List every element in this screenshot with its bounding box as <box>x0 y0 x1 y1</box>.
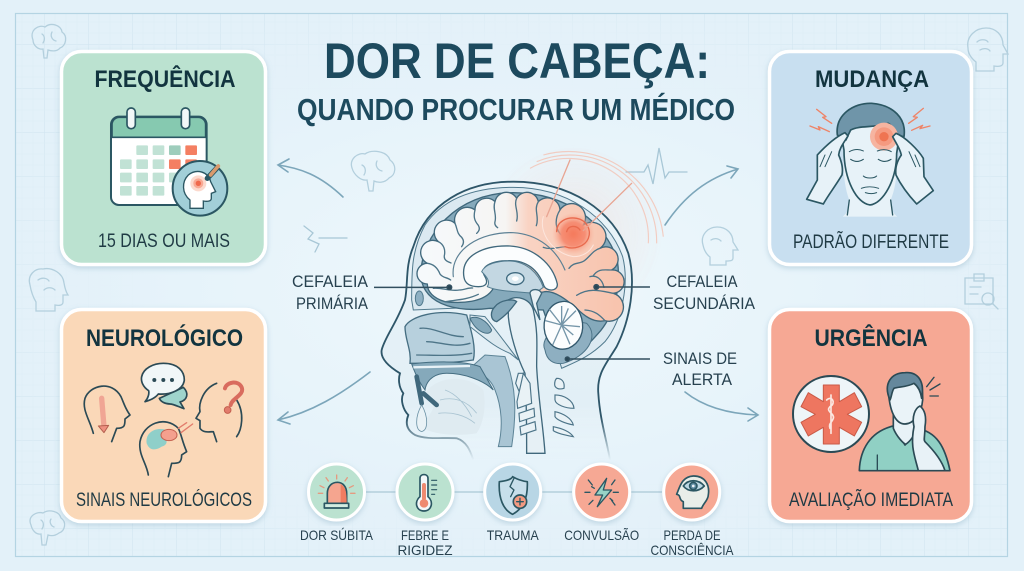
bottom head <box>140 422 187 477</box>
right head with question mark <box>196 383 217 442</box>
sign: convulsão <box>564 464 639 543</box>
sign: perda de consciência <box>650 464 734 558</box>
label: cefaleia secundária <box>653 272 756 313</box>
skull layer <box>412 187 625 368</box>
label leaders <box>374 285 650 361</box>
arrow: center to neurológico <box>278 372 370 424</box>
throat <box>470 355 515 447</box>
frontal sinus <box>415 291 423 306</box>
nasal cavity <box>405 313 474 363</box>
caption: sinais neurológicos: SINAIS NEUROLÓGICOS <box>76 489 252 511</box>
label: cefaleia primária <box>292 272 369 313</box>
label: sinais de alerta: ALERTA <box>672 370 733 389</box>
vertebrae <box>516 373 574 437</box>
cerebellum <box>544 322 592 364</box>
cranial cavity <box>421 193 618 363</box>
speech bubbles <box>159 387 187 409</box>
sign: trauma: TRAUMA <box>487 527 539 543</box>
arrow: center to mudança <box>665 166 738 225</box>
sphenoid sinus <box>491 300 517 322</box>
label: sinais de alerta <box>663 349 737 389</box>
arrow: center to frequência <box>278 159 343 197</box>
panel: urgência <box>770 310 972 522</box>
caption: padrão diferente: PADRÃO DIFERENTE <box>793 231 949 253</box>
sign: febre e rigidez: FEBRE E <box>401 527 449 543</box>
tongue <box>420 379 485 435</box>
icon: emergency star and patient <box>793 373 950 471</box>
caption: 15 dias ou mais: 15 DIAS OU MAIS <box>98 231 230 252</box>
icon: calendar with headache <box>111 108 227 216</box>
caption: avaliação imediata: AVALIAÇÃO IMEDIATA <box>789 489 953 511</box>
sign: perda de consciência: PERDA DE <box>664 527 720 543</box>
title: QUANDO PROCURAR UM MÉDICO <box>297 92 735 127</box>
glow and pain waves <box>483 143 663 323</box>
warning signs row <box>300 464 734 558</box>
hot spot <box>552 213 595 255</box>
teeth and lips <box>417 377 437 405</box>
label: cefaleia secundária: SECUNDÁRIA <box>653 294 756 313</box>
label: sinais de alerta: SINAIS DE <box>663 349 737 368</box>
panel: frequência <box>62 52 266 264</box>
sign: trauma <box>485 464 541 543</box>
head outline <box>382 182 632 460</box>
brainstem and spinal cord <box>508 298 545 453</box>
label: cefaleia secundária: CEFALEIA <box>666 272 738 291</box>
label: cefaleia primária: CEFALEIA <box>292 272 369 291</box>
sign: dor súbita: DOR SÚBITA <box>300 527 374 543</box>
thalamus <box>482 261 543 293</box>
cingulate band <box>453 233 565 277</box>
sign: convulsão: CONVULSÃO <box>564 527 639 543</box>
arrow: center to urgência <box>685 392 758 421</box>
cerebrum <box>417 192 624 321</box>
label: cefaleia primária: PRIMÁRIA <box>296 294 369 313</box>
bone septa <box>470 315 518 360</box>
left head <box>84 386 130 442</box>
title: DOR DE CABEÇA: <box>324 33 710 89</box>
heading: urgência: URGÊNCIA <box>814 324 928 352</box>
sign: febre e rigidez: RIGIDEZ <box>398 542 453 558</box>
panel: mudança <box>770 52 972 264</box>
pain rays <box>547 160 632 231</box>
corpus callosum arch <box>464 246 557 290</box>
icon: person with changed headache <box>807 103 933 217</box>
heading: neurológico: NEUROLÓGICO <box>86 324 243 352</box>
head anatomy illustration <box>374 143 663 460</box>
sign: perda de consciência: CONSCIÊNCIA <box>650 542 734 558</box>
panel: neurológico <box>62 310 266 522</box>
heading: mudança: MUDANÇA <box>815 66 929 93</box>
heading: frequência: FREQUÊNCIA <box>94 65 236 93</box>
palate <box>412 362 493 390</box>
title <box>297 33 735 127</box>
sign: dor súbita <box>300 464 374 543</box>
gyri <box>427 198 613 321</box>
sign: febre e rigidez <box>397 464 453 558</box>
icon: neurological signs <box>84 363 242 477</box>
